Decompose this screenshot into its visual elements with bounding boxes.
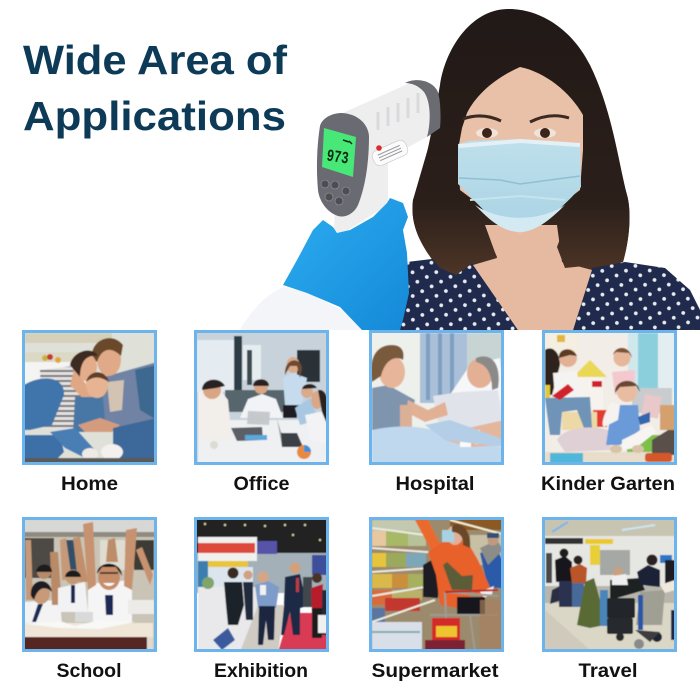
title xyxy=(23,37,287,139)
panel: Home xyxy=(22,331,157,495)
travel photo frame xyxy=(544,518,676,650)
home photo frame xyxy=(24,332,156,464)
label: Exhibition: Exhibition xyxy=(214,661,308,682)
blue gloved hand xyxy=(283,198,409,330)
photo: nurse with patient xyxy=(369,331,505,465)
photo: family on sofa xyxy=(22,331,157,465)
title: Wide Area of xyxy=(23,37,287,83)
photo: children playing xyxy=(542,331,677,465)
school photo frame xyxy=(24,518,156,650)
title: Applications xyxy=(23,93,286,139)
woman's eyes and brows xyxy=(463,116,569,138)
label: Office: Office xyxy=(234,474,290,495)
label: Travel: Travel xyxy=(578,661,638,682)
surgical mask xyxy=(458,139,581,232)
LCD screen: 973 xyxy=(325,148,350,169)
panel: School xyxy=(22,517,157,682)
exhibition photo frame xyxy=(196,518,328,650)
thermometer end cap xyxy=(405,80,441,137)
photo: airport travellers xyxy=(542,517,677,652)
woman's hair back xyxy=(412,9,630,278)
photo: office meeting xyxy=(194,331,329,465)
woman's blouse xyxy=(400,258,700,330)
lab coat sleeve xyxy=(240,287,366,330)
label: Hospital: Hospital xyxy=(396,474,474,495)
panel: Exhibition xyxy=(194,517,329,682)
photo: exhibition hall xyxy=(194,517,329,652)
panel: Office xyxy=(194,331,329,495)
office photo frame xyxy=(196,332,328,464)
red indicator xyxy=(376,145,382,151)
hair lock left xyxy=(412,147,497,275)
photo: shopper at shelves xyxy=(369,517,504,652)
hair lock right xyxy=(557,190,630,268)
thermometer front face xyxy=(317,113,369,217)
LCD screen xyxy=(322,128,356,177)
photo: students cheering xyxy=(22,517,157,652)
barrel ribs xyxy=(378,93,418,130)
panel: Supermarket xyxy=(369,517,504,682)
hospital photo frame xyxy=(370,332,502,464)
woman's neck and chest xyxy=(473,225,592,330)
label: School: School xyxy=(56,661,122,682)
label: Supermarket: Supermarket xyxy=(372,661,499,682)
infrared thermometer xyxy=(317,80,441,235)
kinder garten photo frame xyxy=(544,332,676,464)
panel: Hospital xyxy=(369,331,505,495)
label: Kinder Garten: Kinder Garten xyxy=(541,474,675,495)
product label xyxy=(372,140,408,166)
panel: Kinder Garten xyxy=(541,331,677,495)
panel: Travel xyxy=(542,517,677,682)
label: Home: Home xyxy=(61,474,118,495)
thermometer buttons xyxy=(321,180,350,205)
thermometer body xyxy=(334,82,436,235)
supermarket photo frame xyxy=(370,518,502,650)
woman's face xyxy=(459,67,583,202)
photo: woman in mask having temperature taken xyxy=(240,9,700,330)
